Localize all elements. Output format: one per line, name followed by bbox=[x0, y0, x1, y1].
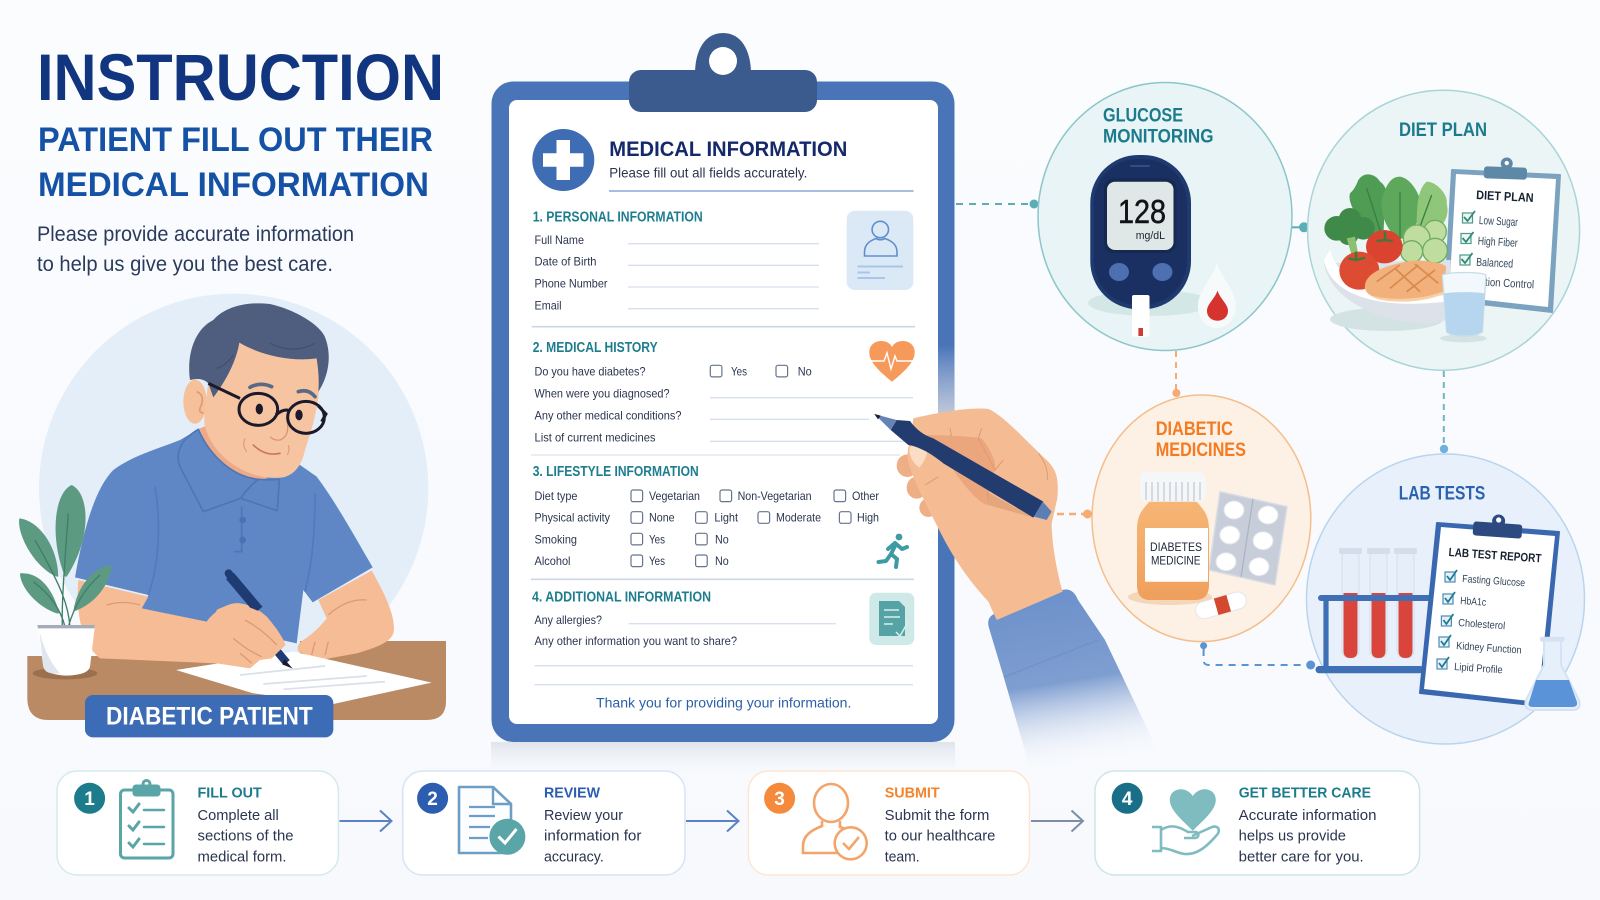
step 2: review: REVIEW bbox=[544, 785, 600, 801]
icon: lab test report clipboard: LAB TEST REPORT bbox=[1448, 545, 1542, 566]
head bbox=[183, 303, 329, 478]
section 2: medical history bbox=[533, 340, 915, 444]
section 3: lifestyle information: High bbox=[857, 511, 879, 525]
clipboard: medical information form bbox=[492, 33, 955, 742]
icon: document card bbox=[869, 593, 914, 645]
tomatoes bbox=[1366, 230, 1403, 263]
icon: glucose meter: mg/dL bbox=[1136, 230, 1165, 242]
icon: capsule bbox=[1194, 590, 1248, 621]
thank-you note: Thank you for providing your information. bbox=[596, 695, 851, 711]
shirt bbox=[75, 428, 373, 643]
step 4: get better care: GET BETTER CARE bbox=[1239, 785, 1371, 801]
section 3: lifestyle information: No bbox=[715, 554, 729, 568]
broccoli bbox=[1324, 208, 1375, 255]
icon: bowl of food bbox=[1324, 174, 1451, 331]
section 1: personal information: Email bbox=[534, 298, 562, 312]
section 4: additional information: Any other information you want to share? bbox=[534, 634, 737, 648]
icon: blister pack bbox=[1209, 492, 1287, 585]
collar bbox=[178, 429, 279, 552]
form header: Please fill out all fields accurately. bbox=[609, 164, 807, 180]
section 3: lifestyle information: Non-Vegetarian bbox=[738, 489, 812, 503]
section 1: personal information: Phone Number bbox=[534, 276, 608, 290]
desk bbox=[27, 641, 446, 720]
icon: medicine bottle: DIABETES bbox=[1150, 542, 1202, 554]
section 2: medical history: Yes bbox=[731, 365, 747, 379]
section 3: lifestyle information: Vegetarian bbox=[649, 489, 700, 503]
section 3: lifestyle information: Light bbox=[714, 511, 739, 525]
icon: glass of water bbox=[1440, 272, 1487, 342]
subtitle: MEDICAL INFORMATION bbox=[38, 166, 429, 204]
arrow 3 bbox=[1031, 810, 1083, 832]
section 3: lifestyle information: Physical activity bbox=[534, 511, 610, 525]
icon: person with check bbox=[803, 784, 867, 859]
icon: medicine bottle: MEDICINE bbox=[1151, 555, 1201, 567]
heading: glucose monitoring bbox=[1103, 105, 1214, 148]
step 3: submit: team. bbox=[885, 849, 920, 865]
form header: MEDICAL INFORMATION bbox=[609, 137, 847, 161]
heading: diabetic medicines bbox=[1156, 418, 1246, 461]
section 2: medical history: Any other medical conditions? bbox=[534, 409, 682, 423]
section 2: medical history: 2. MEDICAL HISTORY bbox=[533, 340, 658, 356]
icon: diet checklist clipboard: High Fiber bbox=[1477, 236, 1518, 250]
icon: blood drop bbox=[1198, 262, 1236, 328]
heading: diet plan: DIET PLAN bbox=[1399, 119, 1487, 141]
step 3: submit: to our healthcare bbox=[885, 828, 995, 844]
step 3: submit: Submit the form bbox=[885, 808, 989, 824]
icon: checklist clipboard bbox=[120, 780, 173, 858]
arrow 2 bbox=[686, 810, 738, 832]
section 4: additional information: 4. ADDITIONAL INFORMATION bbox=[532, 590, 711, 606]
step 1: fill out bbox=[57, 771, 338, 875]
connector: glucose to medicines bbox=[1172, 351, 1180, 397]
lettuce bbox=[1349, 174, 1386, 237]
icon: lab test report clipboard: Kidney Function bbox=[1456, 640, 1522, 657]
step 4: get better care: Accurate information bbox=[1239, 808, 1376, 824]
thumbnail bbox=[909, 443, 927, 468]
section 3: lifestyle information: No bbox=[715, 532, 729, 546]
icon: lab test report clipboard: HbA1c bbox=[1460, 595, 1487, 609]
section 1: personal information bbox=[533, 210, 913, 312]
section 3: lifestyle information: Alcohol bbox=[534, 554, 570, 568]
hair bbox=[189, 303, 329, 397]
glasses bbox=[208, 383, 326, 433]
icon: heart in hand bbox=[1152, 789, 1219, 854]
badge 2 bbox=[417, 783, 448, 814]
badge: diabetic patient: DIABETIC PATIENT bbox=[106, 702, 313, 730]
icon: glucose meter bbox=[1088, 155, 1212, 337]
paper on desk bbox=[176, 652, 432, 704]
heading: glucose monitoring: GLUCOSE bbox=[1103, 105, 1183, 127]
intro text: Please provide accurate information bbox=[37, 223, 354, 246]
panel: diet plan bbox=[1308, 90, 1580, 370]
icon: person card bbox=[847, 211, 913, 290]
face details bbox=[250, 384, 315, 397]
badge: diabetic patient bbox=[85, 695, 333, 737]
icon: lab test report clipboard: Cholesterol bbox=[1458, 617, 1506, 632]
section 3: lifestyle information bbox=[533, 464, 907, 568]
connector: hand to medicines bbox=[1057, 510, 1092, 518]
section 2: medical history: List of current medicines bbox=[534, 430, 656, 444]
section 2: medical history: When were you diagnosed? bbox=[534, 387, 670, 401]
section 3: lifestyle information: Diet type bbox=[534, 489, 578, 503]
step 4: get better care: better care for you. bbox=[1239, 849, 1364, 865]
finger creases bbox=[233, 620, 277, 663]
intro text: to help us give you the best care. bbox=[37, 253, 333, 276]
section 3: lifestyle information: Yes bbox=[649, 532, 665, 546]
section 3: lifestyle information: Yes bbox=[649, 554, 665, 568]
intro text bbox=[37, 223, 354, 276]
step 2: review: accuracy. bbox=[544, 849, 604, 865]
heading: diabetic medicines: MEDICINES bbox=[1156, 439, 1246, 461]
arrow 1 bbox=[340, 810, 392, 832]
step 4: get better care: helps us provide bbox=[1239, 828, 1346, 844]
connector: clipboard to glucose bbox=[956, 200, 1038, 208]
section 3: lifestyle information: 3. LIFESTYLE INFORMATION bbox=[533, 464, 699, 480]
icon: runner bbox=[878, 534, 907, 567]
step 2: review: Review your bbox=[544, 808, 623, 824]
section 1: personal information: 1. PERSONAL INFORMATION bbox=[533, 210, 703, 226]
section 4: additional information: Any allergies? bbox=[534, 613, 602, 627]
icon: medicine bottle bbox=[1128, 472, 1212, 605]
section 3: lifestyle information: Smoking bbox=[534, 532, 577, 546]
heading: glucose monitoring: MONITORING bbox=[1103, 126, 1214, 148]
icon: lab test report clipboard: Fasting Glucose bbox=[1462, 573, 1526, 589]
section 3: lifestyle information: Other bbox=[852, 489, 879, 503]
neck bbox=[197, 413, 300, 482]
badge 1: 1 bbox=[84, 789, 95, 810]
icon: flask bbox=[1525, 637, 1580, 710]
icon: diet checklist clipboard bbox=[1445, 157, 1560, 312]
step 2: review: information for bbox=[544, 828, 642, 844]
connector: diet plan to lab tests bbox=[1440, 371, 1448, 453]
panel: diabetic medicines bbox=[1092, 395, 1311, 642]
section 2: medical history: Do you have diabetes? bbox=[534, 365, 646, 379]
palm shadow bbox=[923, 435, 995, 505]
writing hand with pen bbox=[874, 409, 1160, 775]
badge 3 bbox=[764, 783, 795, 814]
step 3: submit bbox=[748, 771, 1029, 875]
section 4: additional information bbox=[532, 590, 914, 685]
icon: lab test report clipboard bbox=[1420, 513, 1559, 706]
clipboard clip bbox=[629, 33, 817, 112]
section 2: medical history: No bbox=[798, 365, 812, 379]
icon: glucose meter: 128 bbox=[1118, 193, 1166, 230]
icon: diet checklist clipboard: Balanced bbox=[1476, 257, 1513, 271]
subtitle: PATIENT FILL OUT THEIR bbox=[38, 121, 433, 159]
writing hand fingers over pen bbox=[214, 605, 285, 668]
arms and hands bbox=[78, 571, 394, 668]
connector: glucose to diet plan bbox=[1292, 222, 1309, 232]
icon: lab test report clipboard: Lipid Profile bbox=[1454, 661, 1503, 676]
step 4: get better care bbox=[1095, 771, 1420, 875]
icon: heart with pulse bbox=[869, 341, 915, 382]
section 3: lifestyle information: None bbox=[649, 511, 675, 525]
pen bbox=[229, 573, 293, 669]
badge 2: 2 bbox=[427, 789, 438, 810]
title: INSTRUCTION bbox=[37, 40, 444, 114]
illustration: diabetic patient writing at desk bbox=[19, 294, 446, 737]
step 1: fill out: FILL OUT bbox=[198, 785, 262, 801]
section 3: lifestyle information: Moderate bbox=[776, 511, 821, 525]
cucumbers bbox=[1401, 220, 1447, 263]
step 3: submit: SUBMIT bbox=[885, 785, 940, 801]
grilled fish bbox=[1365, 261, 1446, 301]
badge 4 bbox=[1112, 783, 1143, 814]
pen bbox=[874, 414, 1052, 520]
badge 1 bbox=[74, 783, 105, 814]
clipboard shadow bbox=[491, 742, 955, 778]
form header bbox=[532, 129, 914, 191]
icon: diet checklist clipboard: Low Sugar bbox=[1479, 215, 1518, 229]
section 1: personal information: Full Name bbox=[534, 233, 584, 247]
icon: document with check bbox=[459, 787, 525, 855]
step 1: fill out: medical form. bbox=[198, 849, 286, 865]
fingers bbox=[897, 454, 937, 517]
subtitle bbox=[38, 121, 433, 204]
section 1: personal information: Date of Birth bbox=[534, 255, 596, 269]
panel: lab tests bbox=[1306, 454, 1584, 744]
step 2: review bbox=[403, 771, 685, 875]
plant bbox=[19, 485, 112, 679]
step 1: fill out: sections of the bbox=[198, 828, 294, 844]
sleeve bbox=[988, 589, 1160, 775]
panel: glucose monitoring bbox=[1038, 82, 1292, 350]
heading: lab tests: LAB TESTS bbox=[1399, 482, 1485, 504]
icon: diet checklist clipboard: Portion Control bbox=[1470, 276, 1534, 291]
step 1: fill out: Complete all bbox=[198, 808, 279, 824]
icon: test tube rack bbox=[1316, 548, 1432, 673]
hand bbox=[908, 409, 1063, 620]
heading: diabetic medicines: DIABETIC bbox=[1156, 418, 1233, 440]
badge 4: 4 bbox=[1122, 789, 1133, 810]
icon: diet checklist clipboard: DIET PLAN bbox=[1476, 188, 1534, 205]
connector: medicines to lab tests bbox=[1200, 642, 1315, 670]
badge 3: 3 bbox=[774, 789, 785, 810]
